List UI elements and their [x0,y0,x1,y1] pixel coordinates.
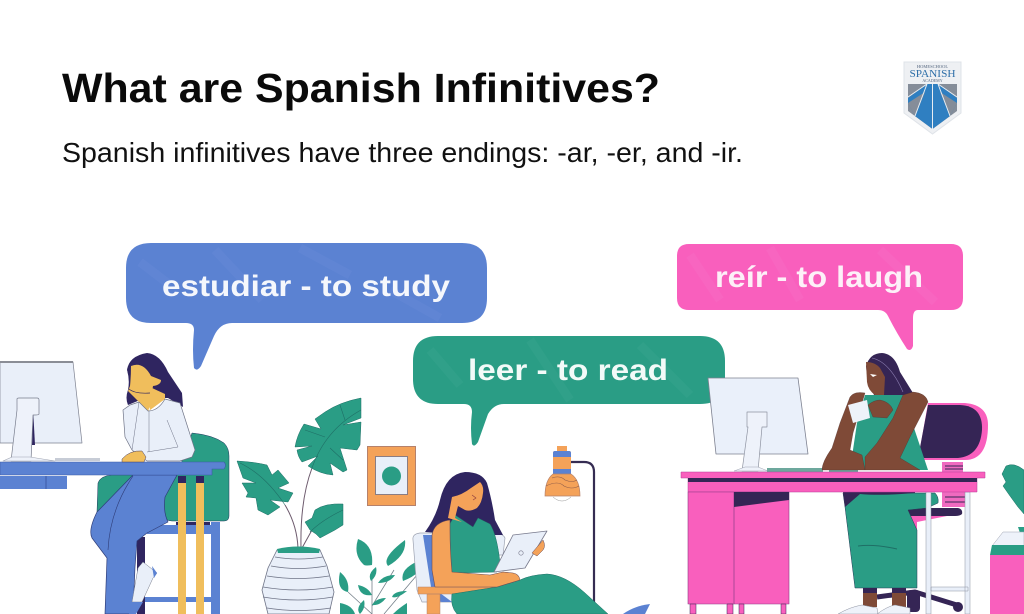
illustration: woman studying at blue desk [0,353,229,614]
illustration: plant and pink box at right edge [990,465,1024,614]
torso [448,515,500,573]
icon: Homeschool Spanish Academy logo: ACADEMY [922,78,943,83]
chair frame [418,587,497,614]
icon: Homeschool Spanish Academy logo: HOMESCHOOL [917,64,948,69]
shoe [623,604,650,614]
illustration: floor lamp [545,446,594,604]
monitor [0,362,100,461]
hand on tablet [532,540,544,556]
illustration: woman reading tablet in chair [413,472,650,614]
monitor and keyboard [708,378,858,472]
icon: Homeschool Spanish Academy logo [904,62,961,134]
trousers [91,475,177,614]
sock [132,562,157,602]
speech bubble: estudiar [126,243,487,370]
mug [848,400,870,423]
speech bubble: leer [413,336,725,446]
dress skirt [843,493,938,588]
office chair [877,403,988,612]
hair [126,353,183,407]
speech bubble: estudiar: estudiar - to study [162,270,450,303]
large leaf [295,398,361,475]
right leaf [305,504,343,538]
stems [285,468,312,548]
hair [425,472,503,535]
yellow desk legs [178,476,204,614]
hair [866,353,913,400]
arm [432,520,520,587]
tablet [494,531,547,572]
speech bubble: reir: reír - to laugh [715,261,923,294]
hand [868,400,893,418]
speech bubble: reir [677,244,963,350]
blouse [123,399,195,461]
legs and lap [452,574,608,614]
face [866,362,885,395]
hand [122,451,146,462]
green chair [97,433,229,521]
left arm [822,392,865,470]
icon: Homeschool Spanish Academy logo: SPANISH [910,69,956,80]
illustration: small leafy plant [339,539,423,614]
legs and slippers [863,588,906,607]
illustration: wall picture [368,446,416,506]
speech bubble: leer: leer - to read [468,354,668,387]
face and neck [128,365,165,411]
cabinet [688,492,789,614]
illustration: woman with mug at pink desk [681,353,988,614]
stool [137,522,220,614]
left leaf [237,461,293,515]
title: What are Spanish Infinitives? [62,65,660,111]
desk top [0,462,226,489]
pot [262,550,334,614]
dress top [850,395,928,470]
desk top [681,472,985,492]
subtitle: Spanish infinitives have three endings: -ar, -er, and -ir. [62,137,743,168]
illustration: monstera plant in pot [237,398,361,614]
chair [413,533,452,602]
right arm [865,392,928,470]
desk legs [926,492,970,614]
face [448,482,483,522]
